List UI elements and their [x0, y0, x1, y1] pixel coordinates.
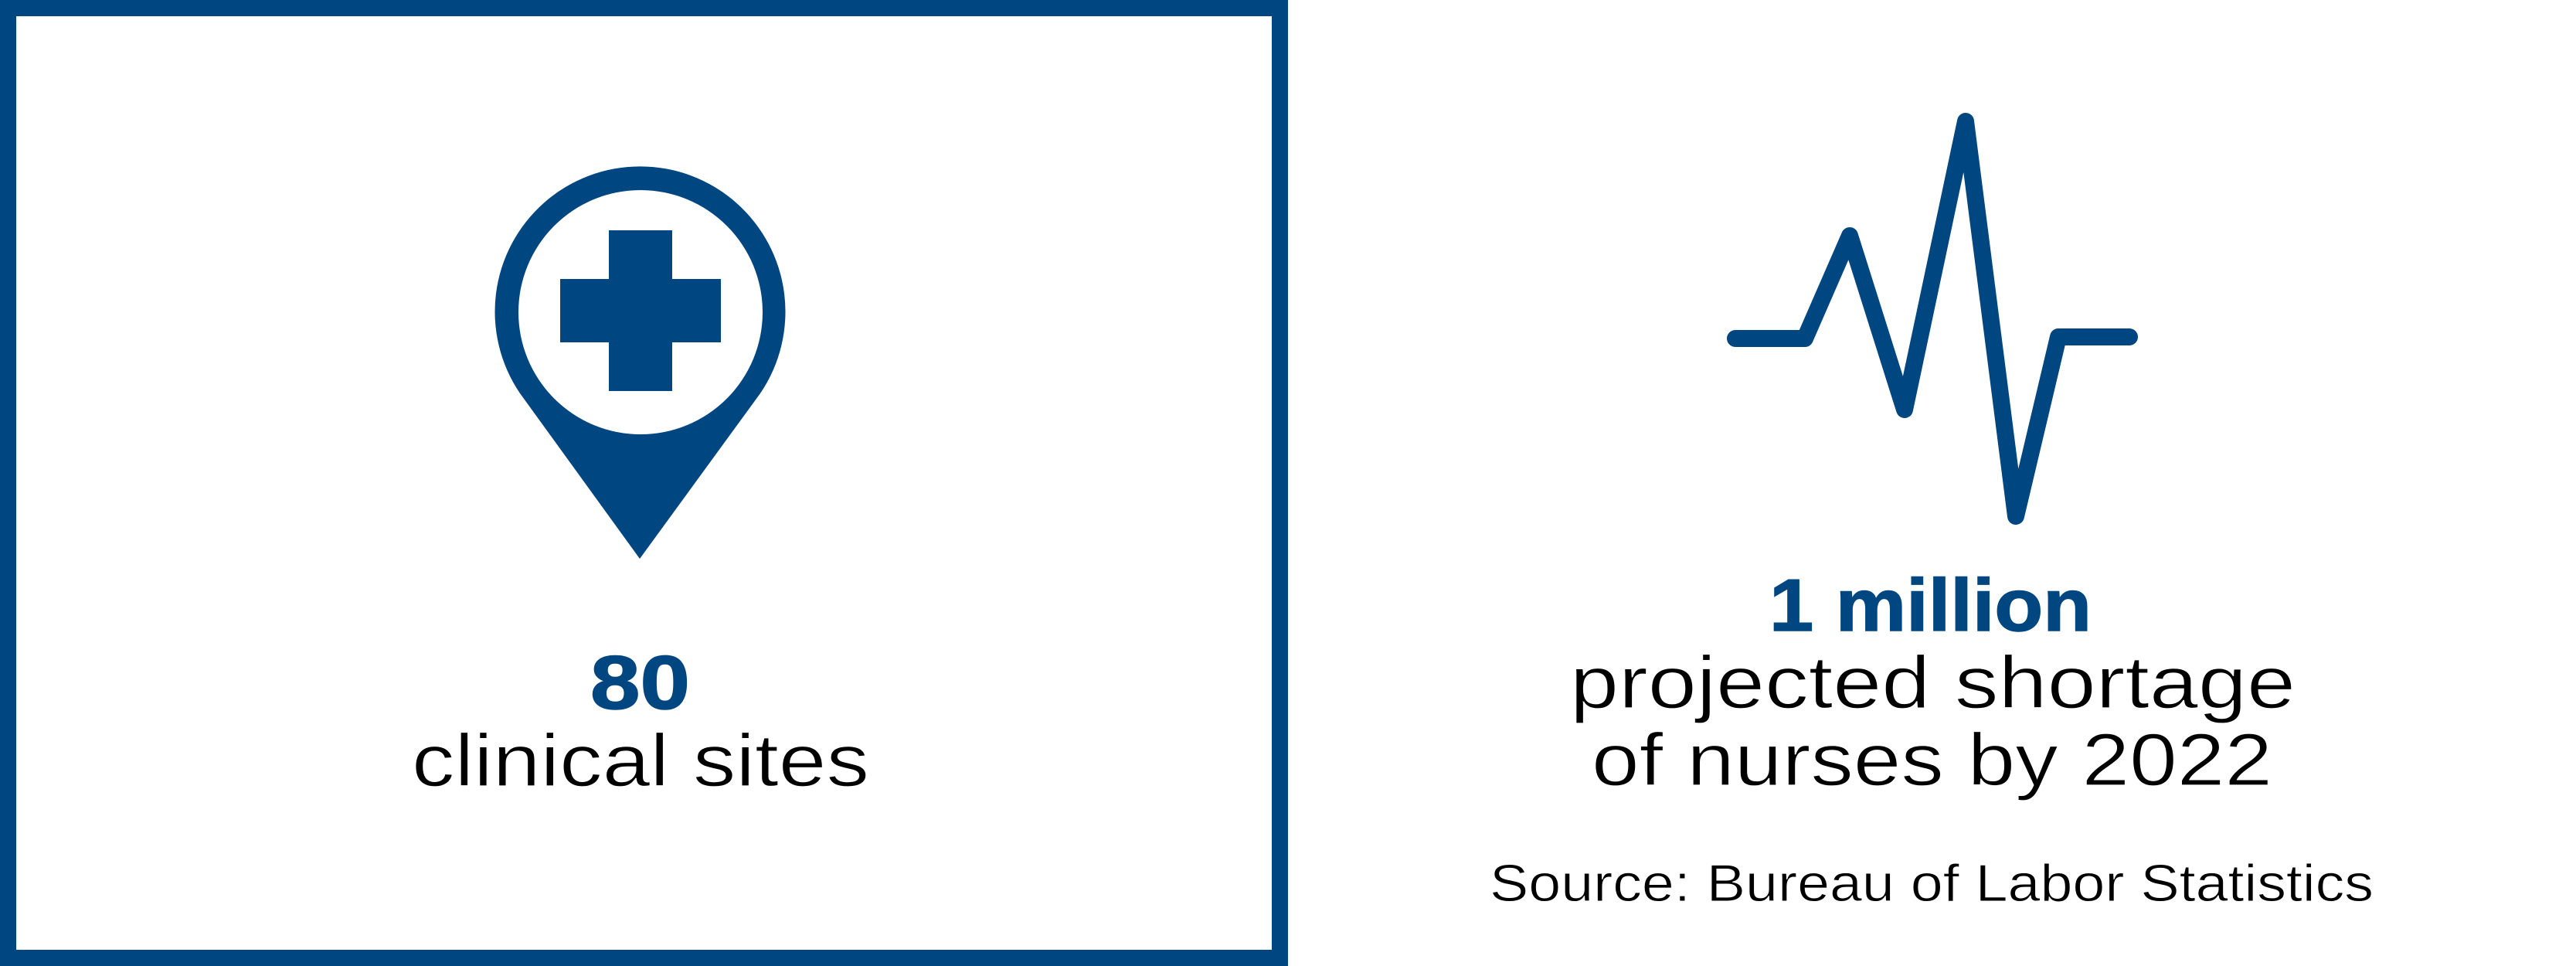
source note: Source: Bureau of Labor Statistics	[1490, 854, 2374, 913]
stat: 1 million projected shortage	[1570, 564, 2296, 801]
stat: 80 clinical sites	[412, 640, 869, 802]
panel border	[8, 8, 1280, 958]
number: 80: 80	[590, 640, 690, 725]
icon: map pin with medical cross	[494, 166, 785, 559]
number: 1 million: 1 million	[1769, 564, 2092, 647]
panel: clinical sites	[8, 8, 1280, 958]
panel: nursing shortage	[1490, 121, 2374, 913]
label: of nurses by 2022: of nurses by 2022	[1592, 719, 2272, 801]
medical cross	[560, 230, 721, 391]
label: projected shortage: projected shortage	[1570, 641, 2296, 724]
label: clinical sites: clinical sites	[412, 719, 869, 802]
pin body	[494, 166, 785, 559]
icon: heartbeat line	[1735, 121, 2129, 516]
